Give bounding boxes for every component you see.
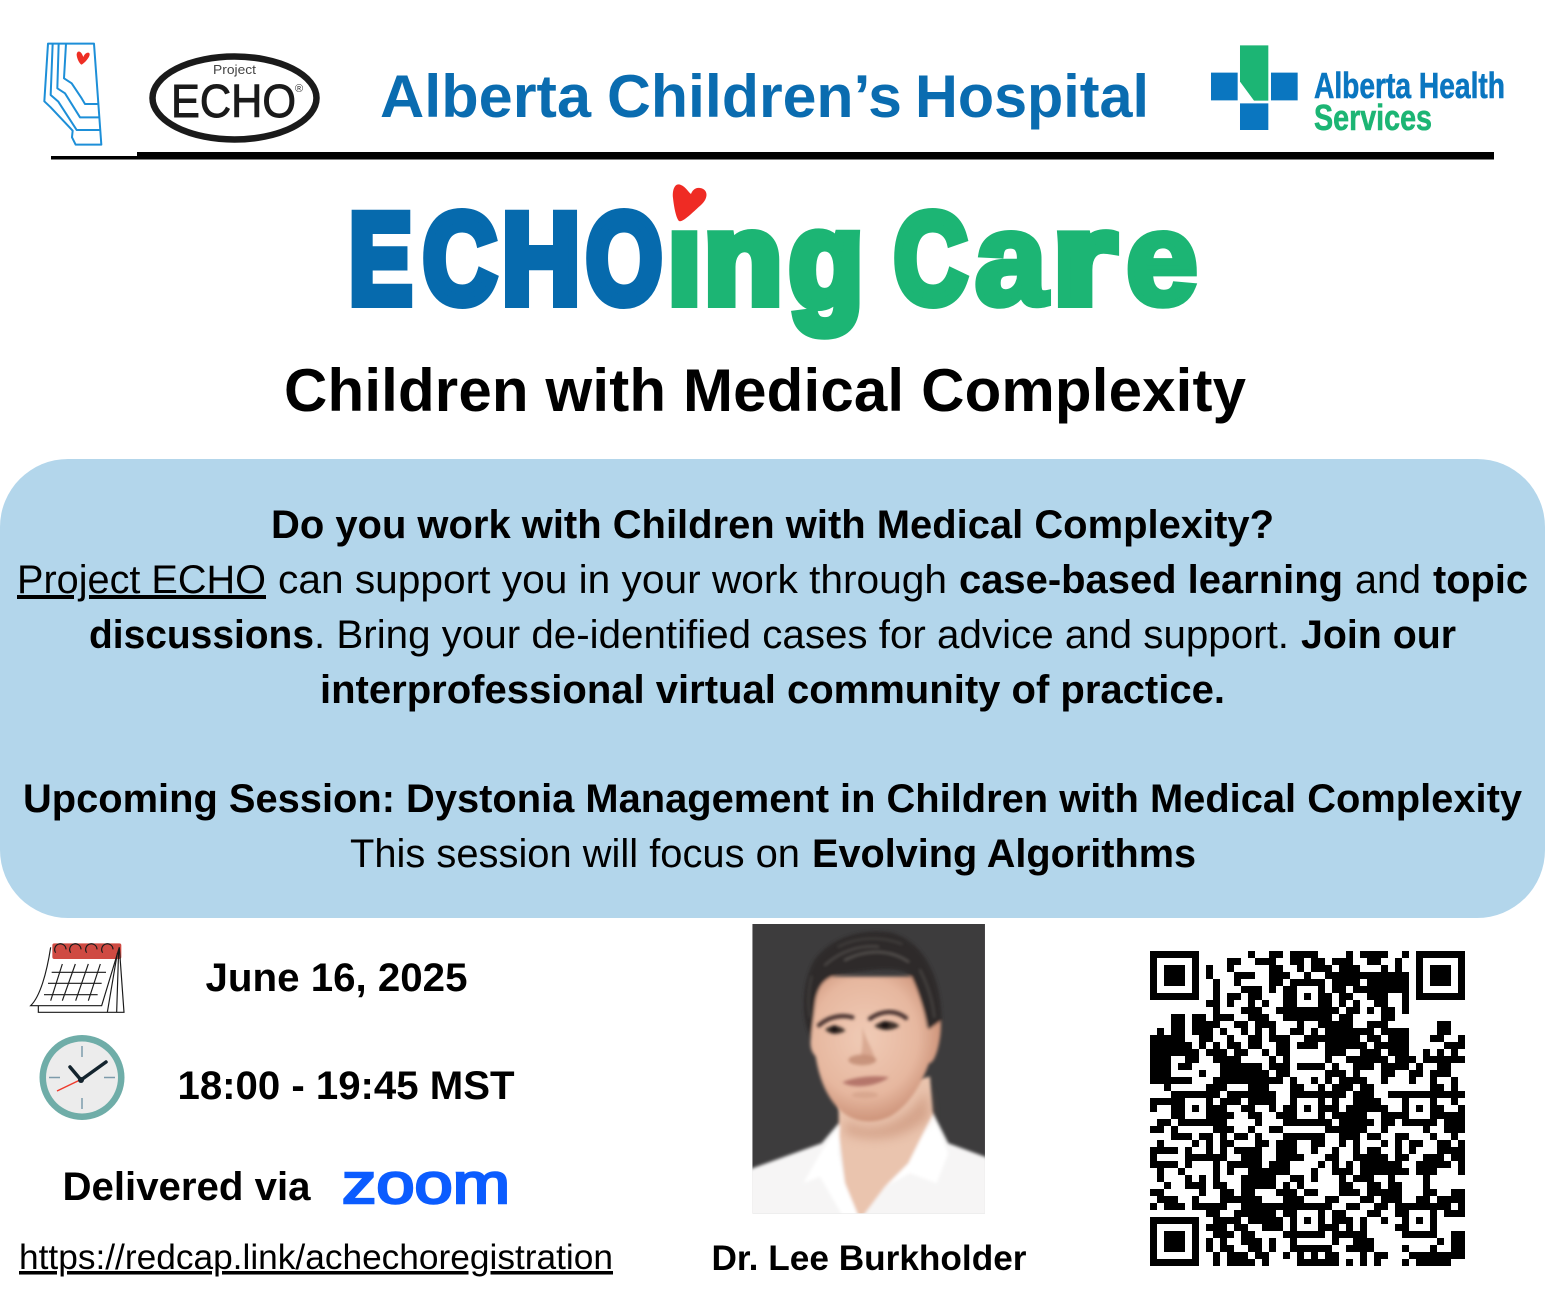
logo: zoom: zoom <box>342 1152 510 1216</box>
panel: session description <box>0 459 1545 918</box>
logo: Project ECHO: ECHO <box>171 75 296 127</box>
delivered via: Delivered via <box>62 1165 311 1209</box>
heading: hospital name <box>380 63 1149 130</box>
title: ECHOing Care <box>349 185 1198 335</box>
description paragraph: interprofessional virtual community of practice. <box>320 668 1225 712</box>
title: ECHOing Care: i <box>668 188 701 331</box>
description paragraph: Join our <box>1301 613 1456 657</box>
description paragraph: . Bring your de-identified cases for advice and support. <box>314 613 1289 657</box>
session focus: Evolving Algorithms <box>812 832 1196 876</box>
title: ECHOing Care: H <box>502 188 580 331</box>
icon: calendar <box>31 943 124 1012</box>
upcoming session: Upcoming Session: Dystonia Management in Children with Medical Complexity <box>23 777 1523 821</box>
title: ECHOing Care: n <box>704 188 782 331</box>
title: ECHOing Care: C <box>423 187 496 331</box>
question heading: Do you work with Children with Medical Complexity? <box>271 503 1274 547</box>
title: ECHOing Care: a <box>975 185 1048 332</box>
title: ECHOing Care: C <box>894 189 967 331</box>
session focus <box>350 832 1196 876</box>
logo: Alberta Health Services <box>1211 45 1505 138</box>
description paragraph: Project ECHO <box>17 558 266 602</box>
title: ECHOing Care: g <box>789 185 863 335</box>
speaker name: Dr. Lee Burkholder <box>712 1239 1027 1278</box>
photo: Dr. Lee Burkholder <box>752 924 985 1214</box>
title: ECHOing Care: r <box>1053 187 1115 330</box>
icon: Alberta outline logo with heart <box>44 44 101 145</box>
description paragraph: topic <box>1433 558 1528 602</box>
heading: hospital name: Children’s <box>607 63 902 130</box>
heading: hospital name: Alberta <box>380 63 592 130</box>
description paragraph: discussions <box>89 613 314 657</box>
description paragraph: case-based learning <box>959 558 1343 602</box>
date: June 16, 2025 <box>206 956 468 1000</box>
description paragraph <box>17 558 1528 712</box>
neck shadow <box>845 1090 930 1139</box>
QR code <box>1150 951 1465 1266</box>
session focus: This session will focus on <box>350 832 800 876</box>
logo: Alberta Health Services: Services <box>1314 97 1432 138</box>
icon: red heart <box>673 184 707 221</box>
title: ECHOing Care: E <box>349 187 412 330</box>
subtitle: Children with Medical Complexity <box>284 357 1247 424</box>
logo: Project ECHO: Project <box>213 63 257 77</box>
title: ECHOing Care: O <box>586 188 662 331</box>
icon: clock <box>40 1035 124 1120</box>
registration link: https://redcap.link/achechoregistration <box>19 1238 613 1277</box>
logo: Project ECHO <box>152 56 316 140</box>
title: ECHOing Care: e <box>1126 185 1198 332</box>
logo: Project ECHO: ® <box>295 83 303 95</box>
description paragraph: and <box>1355 558 1421 602</box>
time: 18:00 - 19:45 MST <box>178 1064 514 1108</box>
description paragraph: can support you in your work through <box>278 558 947 602</box>
heading: hospital name: Hospital <box>915 63 1149 130</box>
